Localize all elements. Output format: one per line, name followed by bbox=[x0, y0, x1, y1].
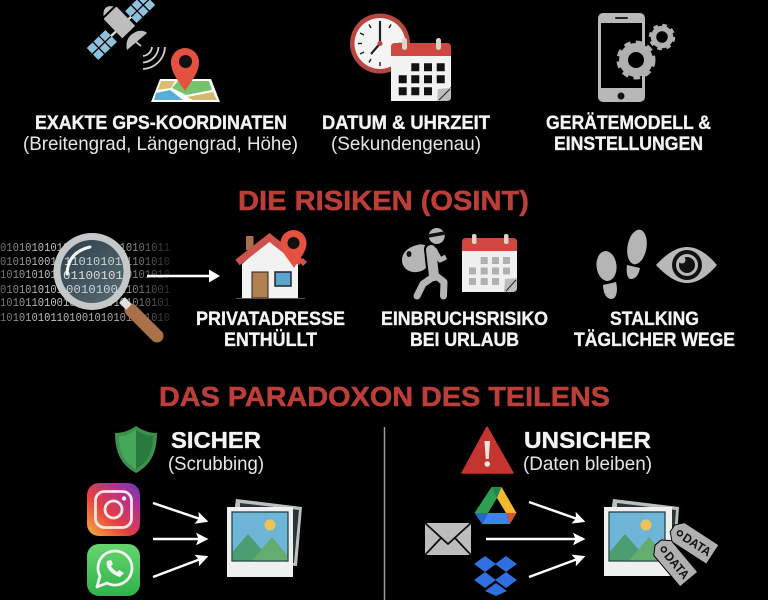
text: private address: ENTHÜLLT bbox=[224, 328, 317, 351]
text: stalking bbox=[574, 308, 735, 351]
text: private address bbox=[196, 308, 345, 351]
binary data background: 101010101101001010101101010 bbox=[0, 311, 170, 325]
binary data background: 101011010010101010101010101 bbox=[0, 296, 170, 310]
text: burglary risk: EINBRUCHSRISIKO bbox=[381, 308, 548, 330]
icon: WhatsApp bbox=[87, 544, 140, 596]
icon: footprints bbox=[595, 228, 649, 299]
text: device model: EINSTELLUNGEN bbox=[554, 133, 703, 155]
icon: green shield bbox=[115, 426, 157, 473]
text: unsafe bbox=[523, 427, 652, 475]
binary data background: 101010101011001011010101010 bbox=[0, 268, 170, 282]
icon: clock bbox=[350, 14, 410, 74]
arrows: unsafe services to photo bbox=[486, 502, 583, 577]
icon: magnifying glass: 0010100 bbox=[66, 283, 118, 297]
icon: map with location pin bbox=[151, 48, 220, 102]
icon: Instagram bbox=[87, 483, 140, 536]
text: stalking: STALKING bbox=[610, 308, 699, 330]
text: burglary risk: BEI URLAUB bbox=[410, 329, 519, 351]
icon: photo stack with data tags bbox=[604, 499, 719, 587]
text: stalking: TÄGLICHER WEGE bbox=[574, 328, 735, 351]
icon: magnifying glass: 11010101 bbox=[64, 255, 122, 269]
text: private address: PRIVATADRESSE bbox=[196, 308, 345, 330]
text: burglary risk bbox=[381, 308, 548, 351]
icon: eye bbox=[656, 247, 717, 283]
icon: warning triangle bbox=[462, 427, 513, 473]
text: safe: SICHER bbox=[171, 427, 261, 453]
icon: burglar bbox=[402, 228, 446, 296]
binary data background: 010101010101010101010101011 bbox=[0, 241, 170, 255]
icon: house with pin bbox=[236, 230, 307, 298]
text: GPS coordinates: EXAKTE GPS-KOORDINATEN bbox=[35, 112, 287, 134]
text: unsafe: (Daten bleiben) bbox=[523, 453, 652, 475]
icon: phone with gears bbox=[598, 13, 674, 102]
text: date and time: (Sekundengenau) bbox=[331, 133, 481, 155]
data tag lower: DATA bbox=[661, 549, 692, 582]
icon: calendar with grey days bbox=[462, 234, 517, 292]
divider bbox=[384, 427, 386, 600]
heading: risks: DIE RISIKEN (OSINT) bbox=[238, 185, 529, 216]
text: GPS coordinates: (Breitengrad, Längengrad, Höhe) bbox=[23, 133, 298, 155]
text: safe bbox=[168, 427, 264, 475]
binary data background: 010101001011101010101101010 bbox=[0, 255, 170, 269]
icon: mail envelope bbox=[425, 523, 471, 555]
icon: Google Drive bbox=[474, 487, 516, 524]
binary data background: 010101010100101001011011001 bbox=[0, 283, 170, 297]
arrows: safe platforms to photo bbox=[153, 503, 206, 577]
arrow: magnifier to house bbox=[147, 270, 220, 282]
data tag upper: DATA bbox=[680, 531, 714, 559]
icon: Dropbox bbox=[474, 556, 517, 596]
text: device model bbox=[546, 111, 711, 155]
icon: magnifying glass: 01100101 bbox=[63, 269, 123, 283]
icon: photo stack (safe) bbox=[227, 499, 302, 577]
text: unsafe: UNSICHER bbox=[524, 427, 651, 453]
icon: satellite bbox=[87, 0, 165, 69]
text: GPS coordinates bbox=[23, 112, 298, 155]
icon: calendar bbox=[391, 38, 451, 101]
heading: paradox of sharing: DAS PARADOXON DES TEILENS bbox=[159, 381, 610, 412]
text: device model: GERÄTEMODELL & bbox=[546, 111, 711, 134]
icon: magnifying glass bbox=[57, 236, 157, 336]
text: safe: (Scrubbing) bbox=[168, 453, 264, 475]
text: date and time: DATUM & UHRZEIT bbox=[322, 112, 490, 134]
binary data background bbox=[0, 241, 170, 325]
text: date and time bbox=[322, 112, 490, 155]
